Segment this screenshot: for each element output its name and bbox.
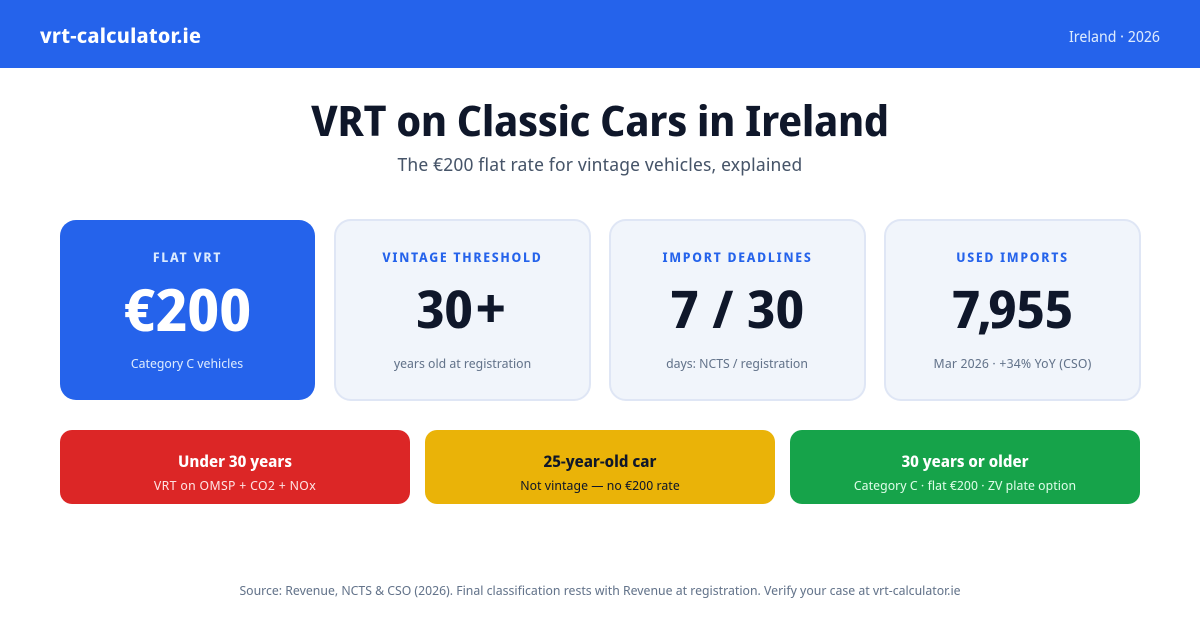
band heading: Under 30 years	[178, 450, 292, 472]
source footnote: Source: Revenue, NCTS & CSO (2026). Final classification rests with Revenue at registration. Verify your case at vrt-calculator.ie	[239, 581, 961, 599]
band: 30 years or older	[790, 430, 1140, 504]
band heading: 25-year-old car	[544, 450, 656, 472]
stat card: vintage threshold	[334, 219, 591, 401]
caption: years old at registration	[394, 354, 531, 372]
caption: Mar 2026 · +34% YoY (CSO)	[934, 354, 1091, 372]
value: €200	[124, 269, 251, 348]
header bar	[0, 0, 1200, 68]
title: VRT on Classic Cars in Ireland	[311, 92, 889, 149]
value: 30+	[416, 269, 506, 345]
band detail: Category C · flat €200 · ZV plate option	[854, 476, 1076, 494]
value: 7 / 30	[670, 273, 805, 344]
band: under 30 years	[60, 430, 410, 504]
locale and year: Ireland · 2026	[1069, 27, 1160, 47]
band heading: 30 years or older	[901, 450, 1029, 472]
label: FLAT VRT	[153, 248, 222, 266]
site name: vrt-calculator.ie	[40, 22, 201, 50]
label: USED IMPORTS	[956, 248, 1069, 266]
caption: Category C vehicles	[131, 354, 243, 372]
stat card: used imports	[884, 219, 1141, 401]
band: 25-year-old car	[425, 430, 775, 504]
stat card: import deadlines	[609, 219, 866, 401]
value: 7,955	[952, 273, 1073, 344]
band detail: Not vintage — no €200 rate	[520, 476, 680, 494]
stat card: flat VRT	[60, 220, 315, 400]
caption: days: NCTS / registration	[666, 354, 808, 372]
band detail: VRT on OMSP + CO2 + NOx	[154, 476, 316, 494]
label: VINTAGE THRESHOLD	[382, 248, 543, 266]
label: IMPORT DEADLINES	[663, 248, 812, 266]
subtitle: The €200 flat rate for vintage vehicles, explained	[398, 152, 802, 177]
